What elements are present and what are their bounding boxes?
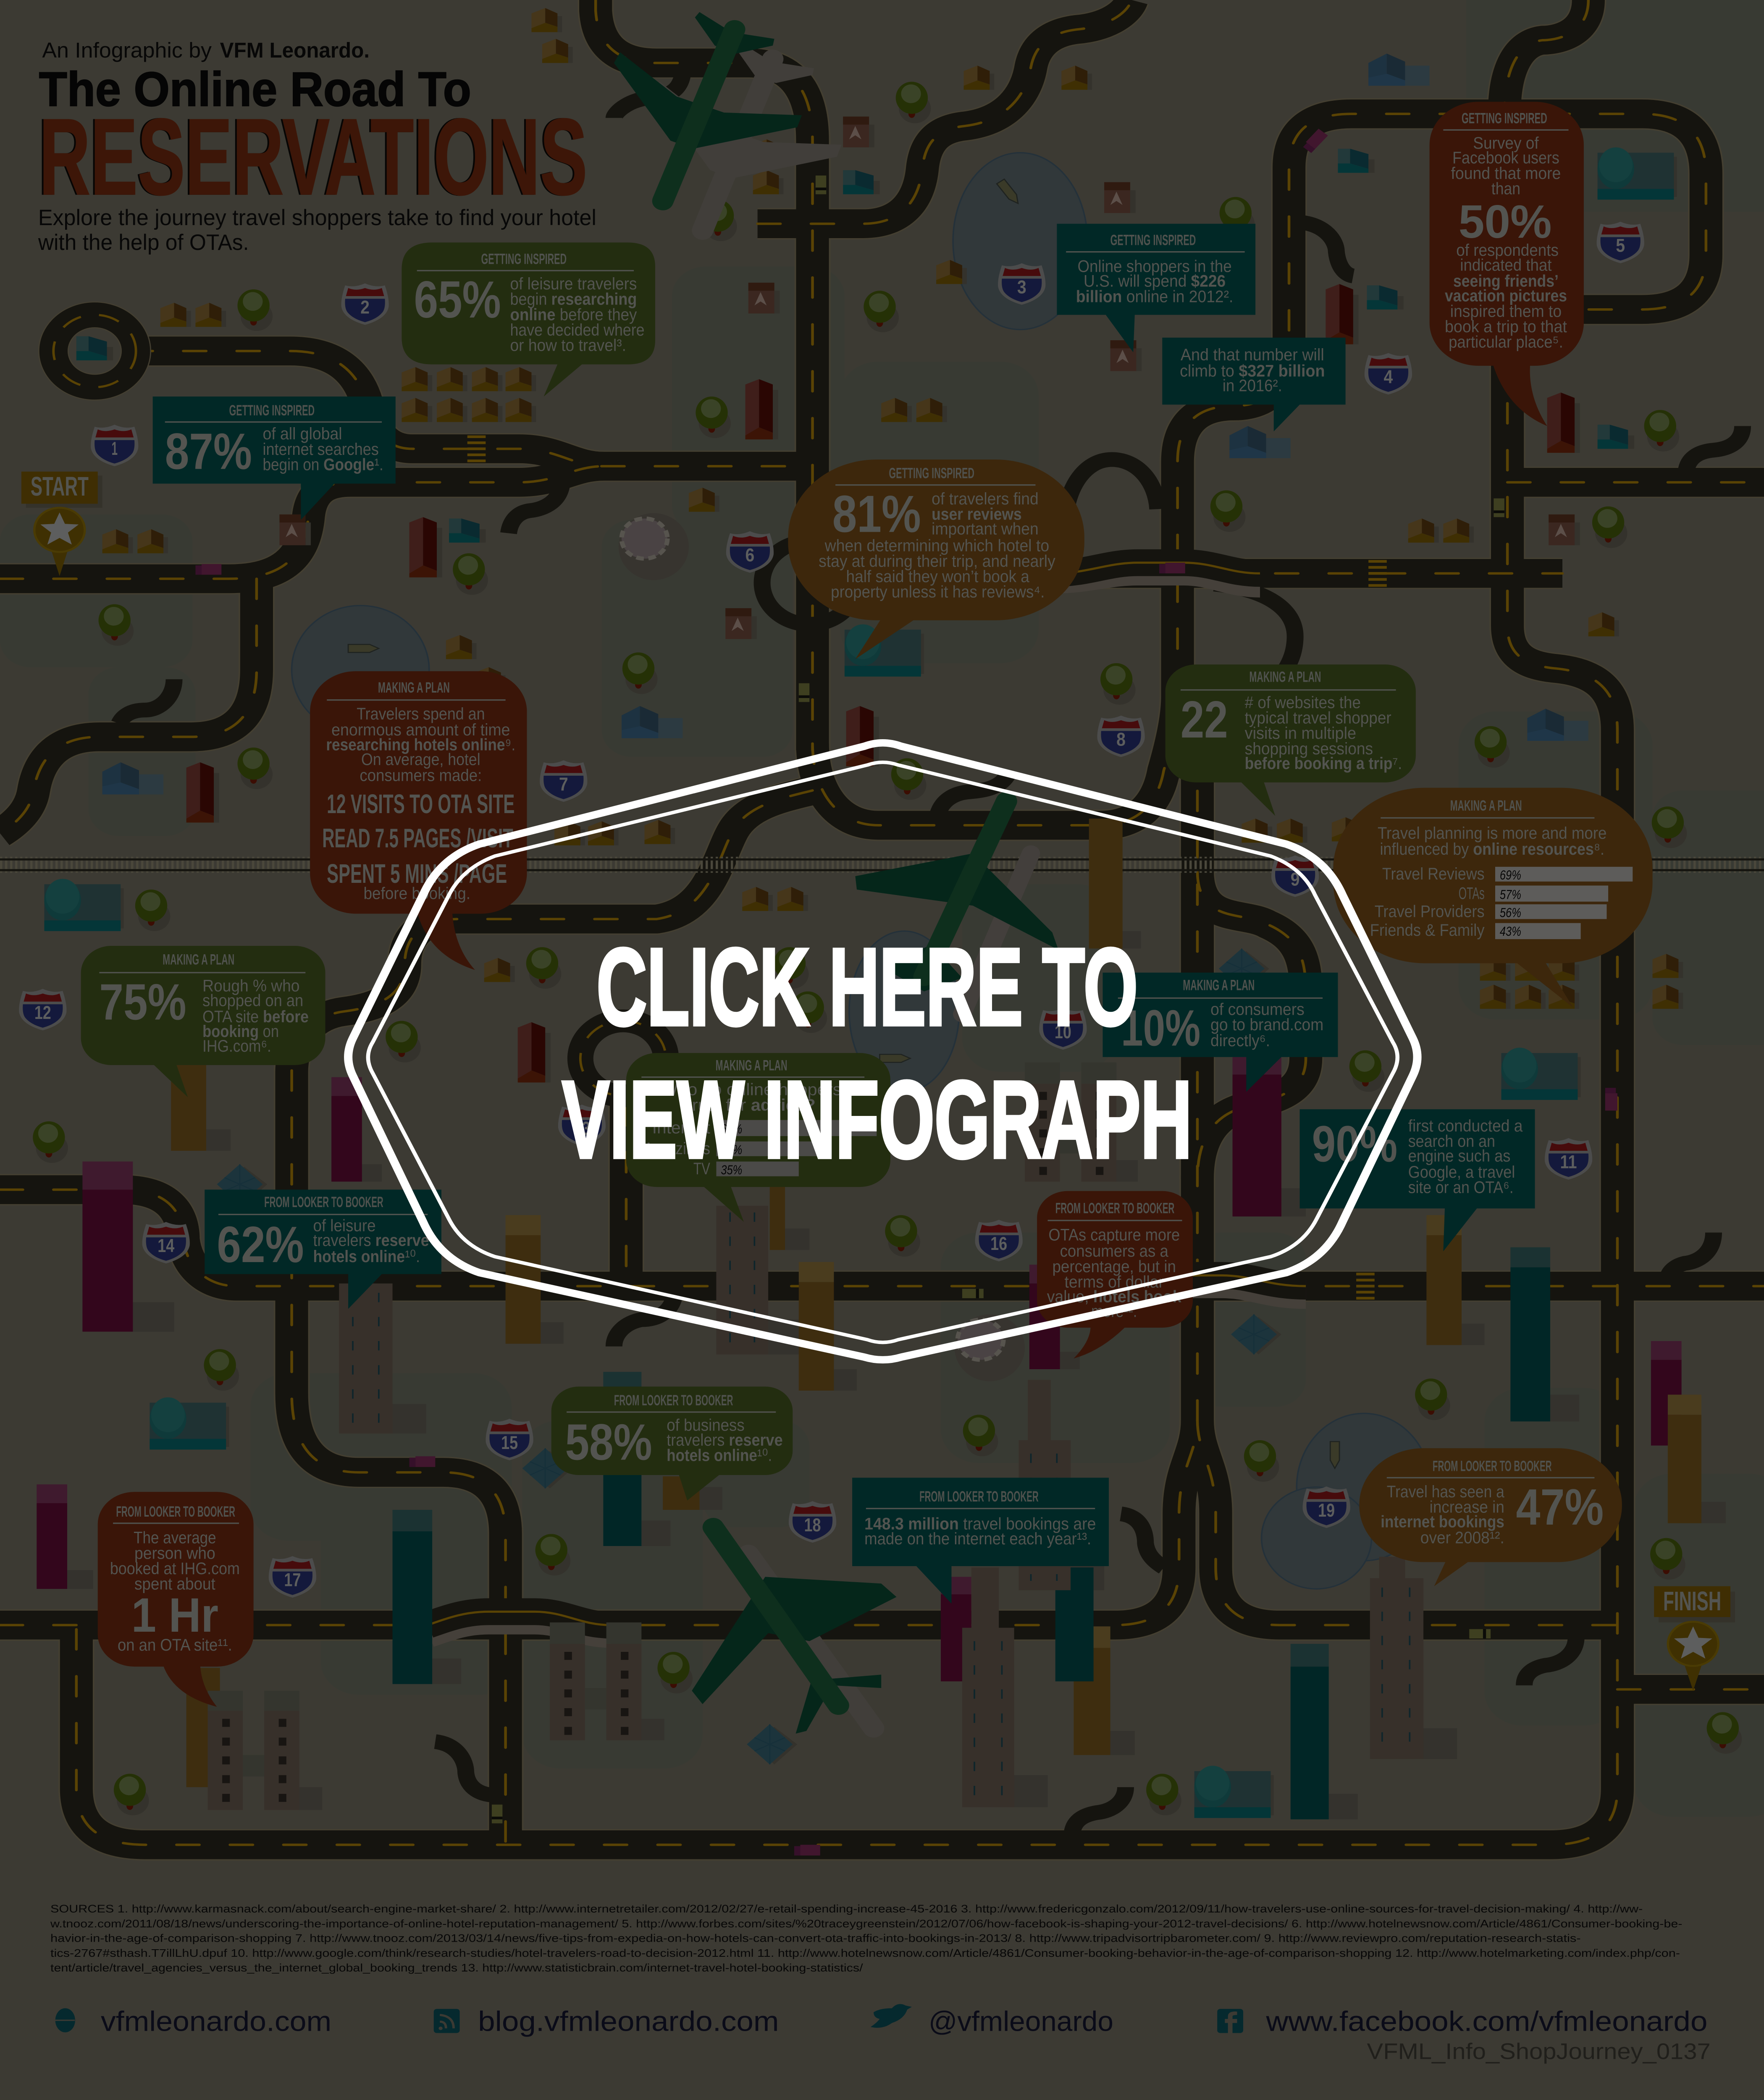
plane 1 [614,12,802,201]
callout: 81%: user reviews [932,505,1022,524]
factories [44,147,1677,1818]
callout: time spent researching [310,671,527,970]
callout: 58%: FROM LOOKER TO BOOKER [614,1392,733,1409]
route shields: 16 [990,1234,1007,1254]
intro: Explore the journey travel shoppers take to find your hotel [38,205,596,230]
callout: 47%: increase in [1430,1498,1504,1517]
callout: 50%: book a trip to that [1445,318,1567,336]
callout: 75%: Rough % who [202,976,299,995]
callout: 50%: vacation pictures [1445,286,1567,305]
callout: 50%: indicated that [1460,256,1552,275]
bar: internet: 69% [721,1122,742,1137]
callout: OTAs capture more: terms of dollar [1065,1273,1164,1292]
website: vfmleonardo.com [101,2006,331,2037]
callout: time spent researching: consumers made: [360,766,482,785]
callout: 10%: MAKING A PLAN [1183,977,1255,993]
route shields: 12 [34,1003,51,1023]
callout: time spent researching: On average, hotel [361,750,480,769]
route shields: 3 [1017,277,1026,298]
route shields: 1 [111,438,118,459]
boats [348,179,1339,1468]
document code: VFML_Info_ShopJourney_0137 [1367,2039,1711,2064]
callout: 75%: shopped on an [202,991,303,1010]
route shields: 14 [158,1236,175,1256]
plane 1 shadow [654,42,842,231]
route shields: 17 [284,1570,301,1591]
callout: 50%: than [1491,179,1520,198]
route shields: 8 [1116,729,1126,750]
callout: 62%: FROM LOOKER TO BOOKER [264,1194,383,1210]
callout: 50%: inspired them to [1450,302,1562,321]
callout: time spent researching: SPENT 5 MINS /PAGE [327,859,507,889]
trees [33,82,1742,1815]
sources: w.tnooz.com/2011/08/18/news/underscoring-the-importance-of-online-hotel-reputation-management/ 5. http://www.forbes.com/sites/%20traceygreenstein/2012/07/06/how-facebook-is-shaping-your-2012-travel-decisions/ 6. http://www.hotelnewsnow.com/Article/4861/Consumer-booking-be- [50,1918,1682,1929]
byline brand: VFM Leonardo. [220,38,370,62]
callout: 22 websites: typical travel shopper [1245,709,1391,727]
route shields: 5 [1616,236,1625,256]
callout: 81%: stay at during their trip, and nearly [819,552,1055,571]
callout: 22 websites: before booking a trip⁷. [1245,754,1402,773]
callout: online shoppers: Online shoppers in the [1077,257,1232,276]
bar: magazines: Magazines [638,1139,710,1158]
badge: outer hexagon outline [348,743,1418,1360]
twitter handle: @vfmleonardo [929,2006,1113,2037]
plane 2 [855,801,1058,1014]
callout: 90% [1300,1109,1535,1251]
route shields: 10 [1055,1022,1071,1042]
callout: 87%: internet searches [262,440,379,459]
lakes [292,153,1431,1589]
roundabout top left [53,315,136,387]
callout: 10%: of consumers [1210,1000,1305,1019]
route shields: 4 [1384,367,1393,388]
callout: 58%: hotels online¹⁰. [667,1446,772,1465]
callout: 75% [81,946,326,1097]
callout: time spent researching: 12 VISITS TO OTA SITE [327,789,514,819]
button text line 2: VIEW INFOGRAPH [562,1058,1192,1181]
callout: 1 hour: The average [134,1528,216,1547]
callout: 90%: 90% [1312,1116,1397,1173]
callout: 81% [788,459,1084,659]
callout: 47%: FROM LOOKER TO BOOKER [1433,1458,1552,1474]
callout: online resources chart: influenced by online resources⁸. [1380,840,1604,858]
callout: OTAs capture more: value, hotels book [1047,1287,1181,1306]
bar: travel providers: 56% [1500,905,1521,920]
magenta skyscrapers [37,1057,1682,1681]
yellow skyscrapers [171,819,1701,1787]
rocky landmarks [619,513,1025,1381]
callout: 62%: of leisure [313,1216,376,1235]
callout: online shoppers: GETTING INSPIRED [1110,232,1196,248]
callout: 327 billion: And that number will [1181,346,1324,364]
facebook url: www.facebook.com/vfmleonardo [1266,2006,1707,2037]
callout: 65% [402,242,655,396]
callout: 90%: site or an OTA⁶. [1408,1178,1514,1197]
bar: OTAs [1459,884,1608,903]
callout: 58%: 58% [565,1414,652,1471]
callout: 50%: of respondents [1456,241,1559,260]
callout: online resources chart [1334,788,1653,1008]
callout: 58% [551,1386,793,1501]
finish marker [1654,1586,1735,1691]
callout: 50%: 50% [1459,196,1552,248]
callout: 1 hour: person who [134,1544,215,1563]
callout: 1 hour: booked at IHG.com [110,1559,240,1578]
callout: 62%: 62% [217,1216,304,1273]
bar: internet: Internet [652,1118,710,1137]
bar: travel reviews [1382,865,1633,883]
callout: 65%: of leisure travelers [510,275,637,293]
callout: time spent researching: MAKING A PLAN [378,679,450,696]
bar: magazines [638,1139,817,1158]
callout: 81%: when determining which hotel to [824,536,1049,555]
callout: time spent researching: Travelers spend an [357,704,485,723]
sources: tent/article/travel_agencies_versus_the_internet_global_booking_trends 13. http://www.statisticbrain.com/internet-travel-hotel-booking-statistics/ [50,1962,863,1974]
icon: globe [55,2008,75,2032]
route shields: 9 [1291,869,1300,890]
route shields: 2 [360,297,370,318]
teal skyscrapers [393,1247,1550,1819]
callout: 65%: begin researching [510,290,637,309]
callout: 50% [1430,102,1584,426]
callout: 58%: of business [667,1416,745,1435]
callout: OTAs capture more: consumers as a [1060,1242,1168,1260]
start marker: START [31,472,89,501]
pyramid buildings [217,948,1281,1764]
sources: tics-2767#sthash.T7illLhU.dpuf 10. http://www.google.com/think/research-studies/hotel-travelers-road-to-decision-2012.html 11. http://www.hotelnewsnow.com/Article/4861/Consumer-booking-behavior-in-the-age-of-comparison-shopping 12. http://www.hotelmarketing.com/index.php/con- [50,1947,1680,1959]
callout: 22 websites: MAKING A PLAN [1250,669,1321,685]
callout: 50%: seeing friends’ [1453,272,1559,291]
callout: 90%: engine such as [1408,1147,1510,1166]
plane 3 shadow [748,1554,874,1728]
bar: internet [652,1118,877,1137]
title block [37,38,596,255]
route shields: 7 [559,774,568,795]
callout: 65%: or how to travel³. [510,336,626,355]
callout: 1 hour [98,1492,254,1707]
callout: 81%: 81% [832,485,921,543]
callout: time spent researching: before booking. [363,884,470,903]
route shields: 15 [501,1433,518,1453]
callout: online shoppers: U.S. will spend $226 [1084,272,1226,291]
callout: 1 hour: FROM LOOKER TO BOOKER [116,1503,235,1520]
callout: 58%: travelers reserve [667,1431,783,1449]
bar: friends and family: Friends & Family [1370,921,1485,940]
callout: time spent researching: enormous amount of time [331,721,510,740]
callout: 10% [1102,973,1338,1092]
callout: 81%: property unless it has reviews⁴. [831,583,1045,601]
overpass bridges [428,563,1306,1633]
small red towers [186,284,1580,1082]
sources [50,1903,1682,1974]
callout: 10%: directly⁶. [1210,1032,1270,1050]
callout: 62%: travelers reserve [313,1231,429,1250]
callout: 148.3 million: made on the internet each year¹³. [864,1529,1091,1548]
grey skyscrapers [339,1206,1423,1807]
blog: blog.vfmleonardo.com [478,2006,779,2037]
sources: havior-in-the-age-of-comparison-shopping 7. http://www.tnooz.com/2013/03/14/news/five-tips-from-expedia-on-how-hotels-can-convert-ota-traffic-into-bookings-in-2013/ 8. http://www.tripadvisortripbarometer.com/ 9. http://www.reviewpro.com/reputation-research-statis- [50,1932,1581,1944]
callout: 22 websites: shopping sessions [1245,739,1373,758]
callout: online shoppers [1057,224,1255,352]
callout: 75%: IHG.com⁶. [202,1037,271,1055]
finish marker: FINISH [1663,1586,1721,1616]
footer links [55,2004,1707,2037]
callout: 50%: particular place⁵. [1449,333,1563,352]
callout: 87%: GETTING INSPIRED [229,402,315,418]
route shields: 11 [1560,1152,1577,1173]
callout: 1 hour: 1 Hr [131,1589,218,1642]
route shields: 13 [573,1118,590,1139]
callout: 87%: 87% [165,423,252,480]
twin towers [208,1063,1116,1810]
callout: 327 billion [1162,338,1346,431]
callout: OTAs capture more: OTAs capture more [1048,1226,1180,1244]
callout: OTAs capture more [1037,1191,1193,1358]
callout: 148.3 million: 148.3 million travel bookings are [864,1515,1096,1533]
sources: SOURCES 1. http://www.karmasnack.com/about/search-engine-market-share/ 2. http://www.internetretailer.com/2012/02/27/e-retail-spending-increase-45-2016 3. http://www.fredericgonzalo.com/2012/09/11/how-travelers-use-online-sources-for-travel-decision-making/ 4. http://ww- [50,1903,1643,1915]
bar: travel providers [1375,902,1606,921]
icon: twitter bird [871,2004,912,2028]
callout: online resources chart: Travel planning is more and more [1378,824,1606,843]
icon: rss [434,2009,460,2033]
byline: An Infographic by [42,38,212,62]
route shields: 19 [1318,1500,1335,1521]
callout: 65%: online before they [510,305,637,324]
callout: 22 websites: 22 [1181,690,1228,749]
callout: 75%: 75% [99,973,186,1031]
callout: advice chart [626,1053,890,1222]
cars and trucks [195,129,1617,1856]
callout: 47%: over 2008¹². [1420,1528,1504,1547]
callout: 75%: OTA site before [202,1007,309,1026]
short branch stubs and loops [119,74,1743,1833]
callout: 327 billion: climb to $327 billion [1180,362,1325,381]
callout: advice chart: trust for advice? [687,1096,816,1115]
icon: facebook [1217,2009,1243,2033]
tall skyscrapers: shadows [67,931,1726,1819]
callout: 50%: Facebook users [1452,149,1559,167]
bar: travel reviews: 69% [1500,868,1521,883]
callout: 65%: 65% [414,270,501,329]
callout: 148.3 million [852,1478,1109,1604]
bar: OTAs: OTAs [1459,884,1485,903]
bar: OTAs: 57% [1500,887,1521,902]
callout: 62% [205,1190,441,1309]
callout: 1 hour: spent about [134,1575,215,1593]
callout: advice chart: MAKING A PLAN [716,1057,788,1074]
heading: The Online Road To [39,63,471,116]
callout: online shoppers: billion online in 2012². [1076,287,1233,306]
bar: travel reviews: Travel Reviews [1382,865,1485,883]
callout: advice chart: Who do online hoppers [662,1080,842,1099]
plane 3 [692,1527,897,1734]
callout: 148.3 million: FROM LOOKER TO BOOKER [919,1488,1039,1504]
callout: 47%: internet bookings [1381,1512,1504,1531]
callout: 10%: 10% [1121,1000,1200,1057]
callout: 50%: GETTING INSPIRED [1462,110,1547,126]
callout: 81%: GETTING INSPIRED [889,465,974,481]
callout: 62%: hotels online¹⁰. [313,1247,420,1266]
callout: 47%: 47% [1516,1478,1604,1536]
railway [0,859,1764,870]
callout: 47% [1359,1448,1622,1586]
teal cubes, offices, brown hotels [76,54,1634,795]
callout: 90%: search on an [1408,1132,1495,1151]
route shields [19,222,1644,1598]
callout: 50%: Survey of [1473,134,1539,152]
callout: 22 websites: visits in multiple [1245,724,1356,743]
callout: 81%: of travelers find [932,490,1039,508]
callout: 65%: have decided where [510,321,645,339]
callout: 81%: half said they won’t book a [846,567,1029,586]
callout: time spent researching: READ 7.5 PAGES /VISIT [322,824,513,853]
callout: 87% [153,396,396,520]
bar: TV [693,1159,799,1178]
callout: 75%: MAKING A PLAN [163,951,234,968]
houses [102,8,1683,1009]
bar: TV: 35% [721,1163,742,1177]
bar: magazines: 43% [721,1142,742,1157]
start marker [21,472,102,576]
callout: 81%: important when [932,520,1039,538]
route shields: 18 [804,1515,821,1536]
callout: 50%: found that more [1451,164,1561,183]
bar: friends and family: 43% [1500,924,1521,939]
callout: online resources chart: MAKING A PLAN [1450,797,1522,814]
callout: 327 billion: in 2016². [1223,376,1282,395]
crosswalks [477,436,1378,1301]
callout: OTAs capture more: FROM LOOKER TO BOOKER [1055,1200,1174,1216]
badge: inner hexagon outline [368,762,1397,1342]
bar: friends and family [1370,921,1581,940]
bar: travel providers: Travel Providers [1375,902,1485,921]
reservations: RESERVATIONS [39,96,588,218]
callout: 65%: GETTING INSPIRED [481,251,567,267]
callout: 22 websites [1166,664,1416,816]
callout: OTAs capture more: more¹². [1091,1302,1137,1321]
callout: time spent researching: researching hotels online⁹. [326,735,515,754]
callout: OTAs capture more: percentage, but in [1052,1257,1176,1276]
callout: 87%: of all global [262,425,342,444]
callout: 75%: booking on [202,1022,279,1041]
callout: 1 hour: on an OTA site¹¹. [118,1635,232,1654]
intro line 2: with the help of OTAs. [38,230,249,255]
callout: 47%: Travel has seen a [1387,1482,1504,1501]
bar: TV: TV [693,1159,710,1178]
callout: 87%: begin on Google¹. [262,455,383,474]
callout: 22 websites: # of websites the [1245,693,1361,712]
ring road centre [580,1021,666,1096]
button text line 1: CLICK HERE TO [596,926,1138,1048]
callout: 90%: Google, a travel [1408,1163,1515,1181]
reservations shadow: RESERVATIONS [37,96,586,218]
route shields: 6 [746,545,754,566]
callout: 10%: go to brand.com [1210,1016,1323,1034]
callout: 90%: first conducted a [1408,1116,1523,1135]
